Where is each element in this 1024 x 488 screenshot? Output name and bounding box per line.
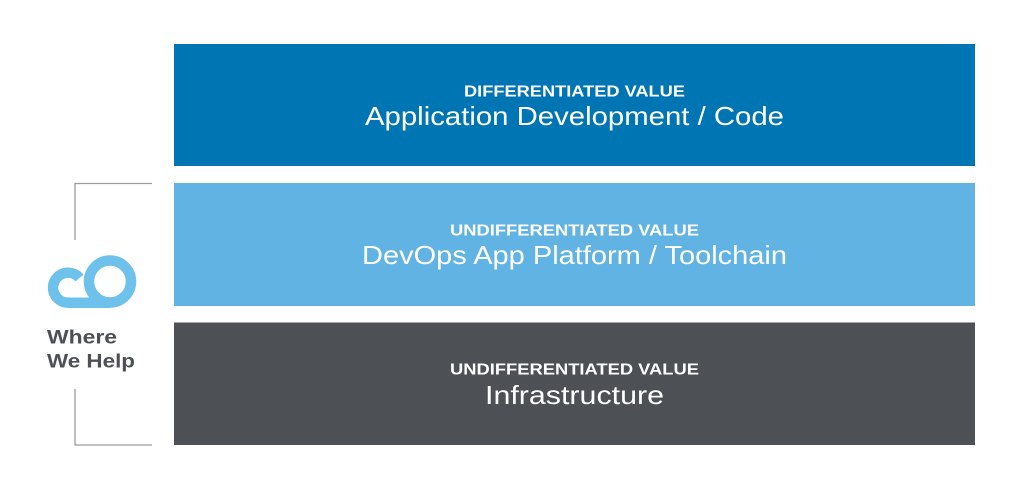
label: where we help	[47, 326, 135, 372]
text: infrastructure: Infrastructure	[485, 380, 664, 410]
label: where we help: Where	[47, 326, 117, 348]
label: where we help: We Help	[47, 350, 135, 372]
heading: differentiated value: DIFFERENTIATED VALUE	[464, 84, 685, 100]
text: application development: Application Development / Code	[365, 101, 784, 131]
heading: undifferentiated value: UNDIFFERENTIATED VALUE	[450, 222, 699, 240]
panel: differentiated value	[174, 44, 975, 166]
bracket: top	[75, 184, 152, 240]
icon: cloud logo	[53, 260, 131, 303]
panel: infrastructure	[174, 322, 975, 445]
text: devops app platform: DevOps App Platform / Toolchain	[362, 240, 787, 270]
panel: devops platform	[174, 183, 975, 306]
bracket: bottom	[75, 389, 152, 445]
heading: undifferentiated value: UNDIFFERENTIATED VALUE	[450, 362, 699, 378]
